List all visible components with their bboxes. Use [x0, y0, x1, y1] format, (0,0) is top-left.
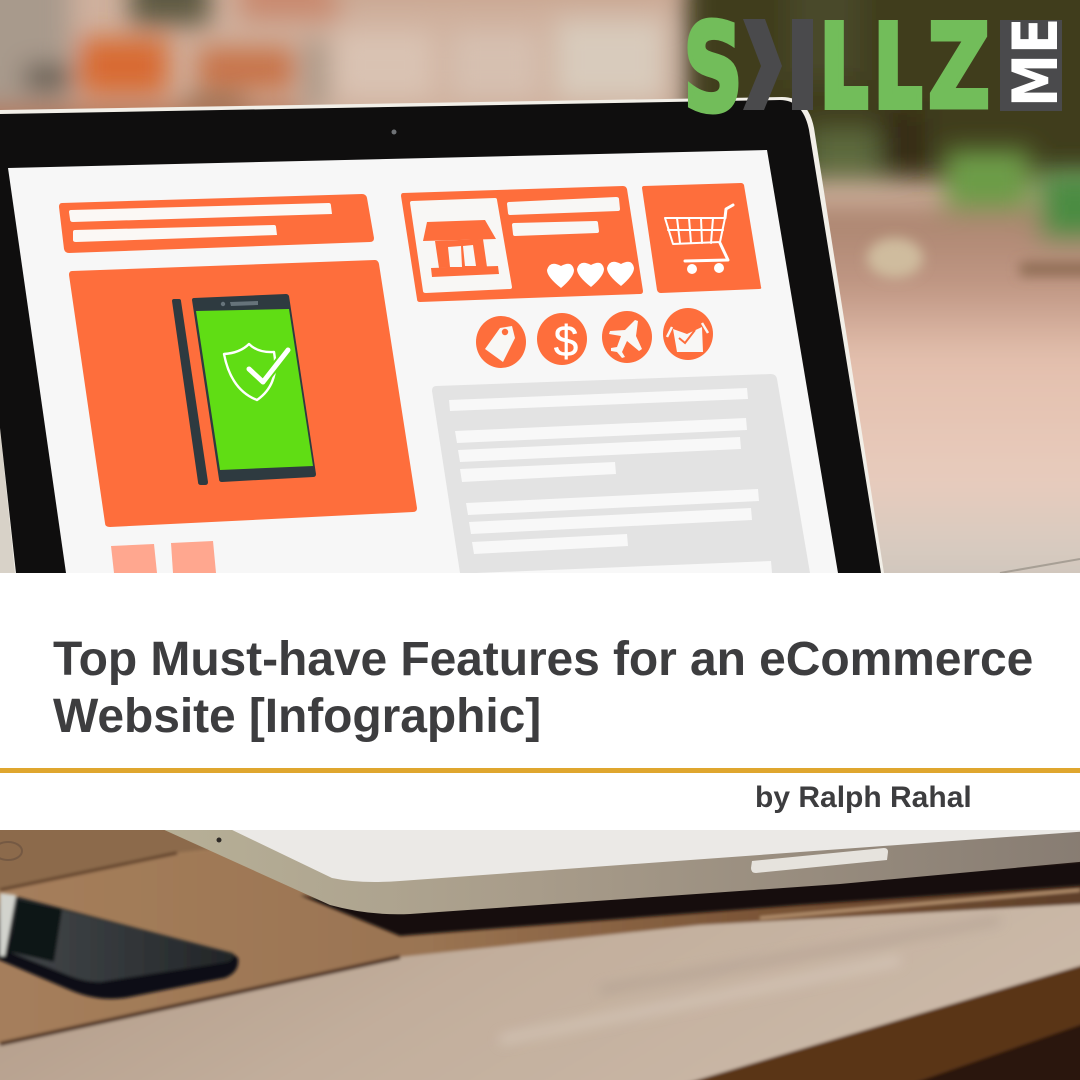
laptop lid with black bezel [0, 97, 884, 573]
icon: shield with check [224, 344, 288, 400]
panel: shopping cart card [642, 183, 761, 293]
logo: SkillzMe: L [820, 3, 868, 133]
smartphone on table [0, 893, 238, 999]
white title band [0, 573, 1080, 830]
panel: gray text block [432, 374, 810, 573]
laptop screen [8, 150, 838, 573]
icon: smartphone [192, 294, 316, 482]
title: Website [Infographic] [53, 690, 541, 743]
panel: phone security card [69, 260, 417, 527]
icon: store [423, 220, 499, 277]
title [53, 633, 1033, 743]
icon: dollar: $ [554, 317, 578, 366]
icon: phone side edge [172, 299, 208, 485]
logo letter K [743, 19, 813, 110]
webcam [392, 130, 396, 134]
gold divider [0, 768, 1080, 773]
wooden table [0, 826, 1080, 1080]
panel: header bar [59, 194, 374, 253]
icon: open box with check [663, 308, 713, 360]
icon: dollar [537, 313, 587, 366]
logo: SkillzMe [684, 0, 1072, 139]
wood knot [0, 842, 22, 860]
laptop base [160, 828, 1080, 936]
logo: SkillzMe: L [874, 3, 922, 133]
title: Top Must-have Features for an eCommerce [53, 633, 1033, 686]
icon: price tag [476, 316, 526, 368]
logo badge ME: ME [999, 18, 1072, 107]
logo: SkillzMe: Z [928, 0, 990, 135]
laptop notch [751, 848, 888, 873]
icon: three hearts [547, 262, 634, 288]
byline: by Ralph Rahal [755, 781, 972, 814]
small pink thumbnails [111, 541, 216, 573]
icon: airplane [602, 311, 652, 363]
icon: shopping cart [665, 205, 733, 261]
plank grain streaks [500, 920, 1000, 1040]
icon row: tag, dollar, plane, mailbox [476, 308, 713, 368]
blurred background: brick wall and garden [0, 0, 1080, 605]
logo: SkillzMe: S [684, 0, 742, 139]
panel: store card [401, 186, 643, 302]
